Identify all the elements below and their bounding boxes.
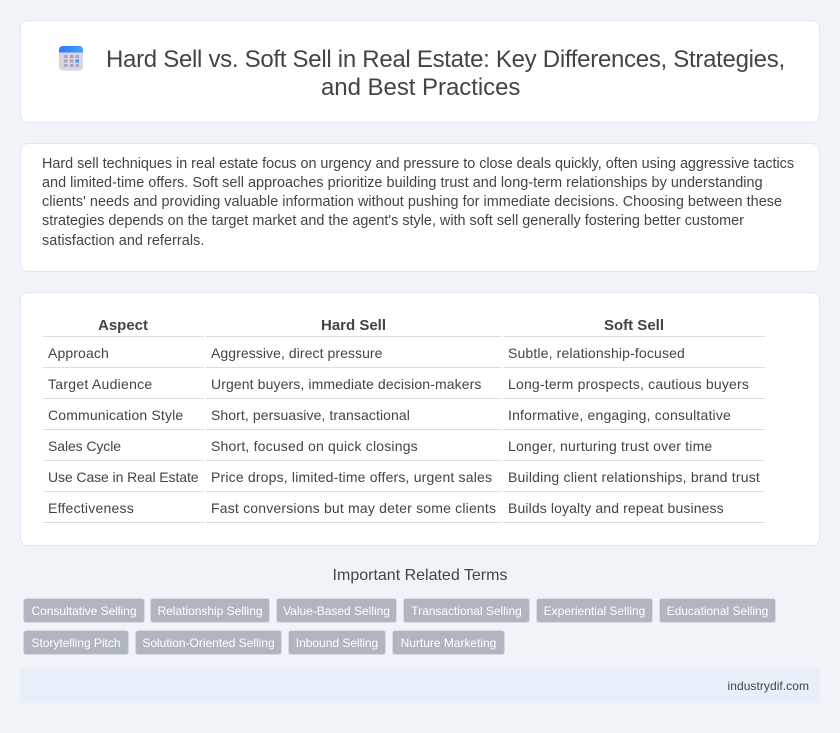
table row: target audience: Target Audience [48, 376, 152, 392]
text block: summary: clients' needs and providing valuable information without pushing for immediate decisions. Choosing between these [42, 194, 782, 210]
tag: Educational Selling [667, 604, 768, 618]
footer source: industrydif.com [728, 679, 809, 693]
text block: summary: satisfaction and referrals. [42, 233, 204, 249]
tag [536, 598, 653, 623]
tag [659, 598, 776, 623]
table row: effectiveness: Effectiveness [48, 500, 134, 516]
table row: approach: Subtle, relationship-focused [508, 345, 685, 361]
footer bar [20, 669, 820, 703]
title: Hard Sell vs. Soft Sell in Real Estate: Key Differences, Strategies, [106, 46, 785, 73]
table header [98, 317, 664, 334]
table row: target audience: Long-term prospects, cautious buyers [508, 376, 749, 392]
tag [276, 598, 397, 623]
table header: Aspect [98, 317, 148, 334]
table row: communication style [48, 407, 731, 423]
tag: Value-Based Selling [283, 604, 390, 618]
table row: target audience [48, 376, 749, 392]
table row: communication style: Communication Style [48, 407, 183, 423]
table row: effectiveness: Fast conversions but may deter some clients [211, 500, 496, 516]
table row: approach: Approach [48, 345, 109, 361]
tag: Transactional Selling [411, 604, 522, 618]
heading: related terms: Important Related Terms [333, 567, 507, 584]
tag: Storytelling Pitch [31, 636, 120, 650]
table row: use case: Price drops, limited-time offers, urgent sales [211, 469, 492, 485]
table header: Hard Sell [321, 317, 386, 334]
table row: use case: Building client relationships, brand trust [508, 469, 760, 485]
table row: use case: Use Case in Real Estate [48, 469, 198, 485]
tag: Experiential Selling [544, 604, 645, 618]
table row: sales cycle [48, 438, 712, 454]
table header: Soft Sell [604, 317, 664, 334]
tag [392, 630, 505, 655]
title: and Best Practices [321, 74, 520, 101]
panel: summary [20, 143, 820, 272]
tag [23, 598, 145, 623]
text block: summary: and limited-time offers. Soft sell approaches prioritize building trust and long-term relationships by understanding [42, 175, 763, 191]
tag [23, 630, 129, 655]
table row: effectiveness: Builds loyalty and repeat business [508, 500, 724, 516]
tag [135, 630, 282, 655]
panel: header [20, 20, 820, 123]
panel: comparison table [20, 292, 820, 546]
tag: Consultative Selling [32, 604, 136, 618]
table row: target audience: Urgent buyers, immediate decision-makers [211, 376, 482, 392]
tag: Solution-Oriented Selling [142, 636, 275, 650]
tag: Nurture Marketing [401, 636, 496, 650]
related terms tags [23, 598, 776, 655]
tag [288, 630, 386, 655]
table row: communication style: Informative, engaging, consultative [508, 407, 731, 423]
table row: approach [48, 345, 685, 361]
tag [150, 598, 270, 623]
table row: communication style: Short, persuasive, transactional [211, 407, 410, 423]
text block: summary: strategies depends on the target market and the agent's style, with soft sell generally fostering better customer [42, 213, 744, 229]
table row: sales cycle: Short, focused on quick closings [211, 438, 418, 454]
table row: sales cycle: Sales Cycle [48, 438, 121, 454]
table row: sales cycle: Longer, nurturing trust over time [508, 438, 712, 454]
table row: use case [48, 469, 760, 485]
table row: approach: Aggressive, direct pressure [211, 345, 383, 361]
tag [403, 598, 530, 623]
text block: summary [42, 156, 794, 249]
title [106, 46, 785, 101]
tag: Relationship Selling [158, 604, 262, 618]
icon: calendar [59, 46, 83, 70]
tag: Inbound Selling [296, 636, 378, 650]
text block: summary: Hard sell techniques in real estate focus on urgency and pressure to close deals quickly, often using aggressive tactics [42, 156, 794, 172]
table row: effectiveness [48, 500, 724, 516]
